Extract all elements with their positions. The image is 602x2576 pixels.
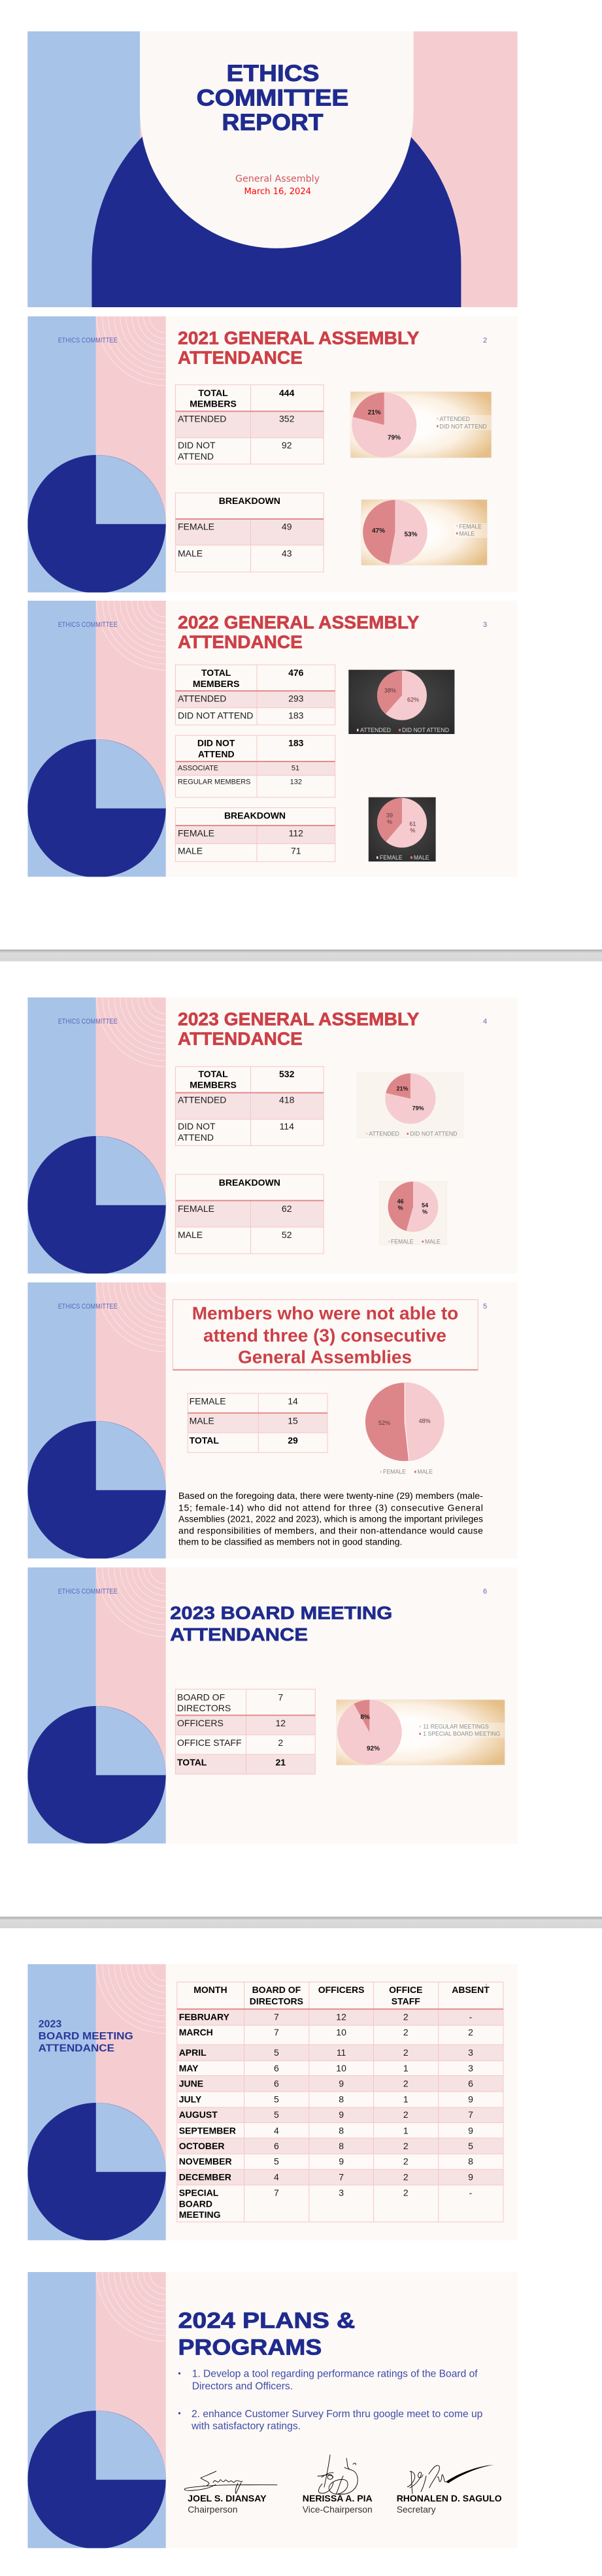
table: 2022 totals: ATTENDED [178,694,226,704]
data rows: - [469,2187,473,2198]
table: 2023 totals: 114 [280,1121,294,1131]
pie chart: 2022 attendance [348,670,454,734]
pie chart: 2023 attendance: ATTENDED [369,1130,399,1137]
footer label: ETHICS COMMITTEE [58,1303,118,1311]
data rows: 5 [274,2109,279,2120]
table: 2023 breakdown: MALE [178,1229,203,1240]
heading [178,612,420,652]
table: 2023 totals: TOTAL [198,1069,228,1079]
data rows: 8 [339,2125,344,2135]
panel: 2023 general assembly attendance [27,928,518,1274]
data rows: 7 [274,2012,279,2022]
data rows: 7 [274,2187,279,2198]
data rows: NOVEMBER [179,2156,232,2166]
cover title [197,61,348,135]
footer label: ETHICS COMMITTEE [58,1588,118,1596]
table: 2022 totals: 476 [288,667,304,678]
pie chart: 2023 gender: % [422,1209,427,1215]
signature block: chairperson: JOEL S. DIANSAY [188,2493,267,2503]
table: 2022 did not attend: 183 [288,738,304,748]
signature block: secretary: RHONALEN D. SAGULO [397,2493,502,2503]
boxed heading: Members who were not able to [192,1303,458,1323]
explanatory paragraph: Assemblies (2021, 2022 and 2023), which is among the important privileges [178,1514,483,1524]
explanatory paragraph: 15; female-14) who did not attend for three (3) consecutive General [178,1503,483,1513]
pie chart: regular vs special meetings: 1 SPECIAL BOARD MEETING [423,1730,500,1737]
table: 2022 did not attend: REGULAR MEMBERS [178,778,251,786]
pie chart: 2022 attendance: ATTENDED [360,727,391,733]
data rows: SEPTEMBER [179,2125,236,2135]
table: 2023 totals [175,1067,324,1146]
table: absentee counts: MALE [190,1415,214,1426]
data rows: - [469,2012,473,2022]
pie chart: 2021 attendance: 21% [368,409,381,416]
side heading: 2023 [39,2018,61,2030]
pie chart: absentees by gender: FEMALE [383,1469,406,1475]
pie chart: 2023 gender: FEMALE [391,1238,414,1245]
table: 2021 totals [175,385,324,464]
pie chart: 2023 gender: 46 [397,1198,404,1205]
boxed heading: General Assemblies [238,1347,412,1367]
data rows: MARCH [179,2027,213,2037]
pie chart: absentees by gender: 52% [378,1420,390,1426]
table: 2021 breakdown: BREAKDOWN [219,495,280,506]
table: board attendance summary: BOARD OF [177,1692,225,1702]
cover title: REPORT [222,110,323,135]
pie chart: absentees by gender: MALE [417,1469,433,1475]
table: 2021 totals: MEMBERS [190,399,237,409]
data rows: FEBRUARY [179,2012,230,2022]
heading [170,1603,392,1645]
pie chart: 2021 attendance: ATTENDED [439,416,470,422]
header row: DIRECTORS [250,1996,303,2006]
table: 2023 breakdown: FEMALE [178,1203,214,1214]
table: 2023 totals: MEMBERS [190,1080,237,1090]
data rows: 9 [339,2079,344,2089]
table: 2022 totals: 293 [288,694,304,704]
heading [178,2309,355,2360]
pie chart: 2022 attendance: 62% [407,697,419,703]
table: 2022 breakdown: FEMALE [178,828,214,839]
pie chart: 2021 attendance [350,392,492,458]
data rows: 4 [274,2125,279,2135]
signature block: secretary [397,2465,502,2515]
pie chart: absentees by gender: 48% [419,1418,431,1424]
data rows: 1 [403,2125,409,2135]
table: board attendance summary: TOTAL [177,1757,207,1767]
data rows: 5 [274,2156,279,2166]
table: 2022 breakdown: BREAKDOWN [224,811,286,821]
data rows: 2 [403,2079,409,2089]
data rows: 3 [468,2063,473,2073]
table: 2022 breakdown: 71 [291,846,301,856]
table: monthly attendance [177,1982,503,2222]
data rows: 9 [468,2125,473,2135]
table: 2023 breakdown: 62 [282,1203,292,1214]
side heading: ATTENDANCE [39,2043,114,2054]
data rows: 6 [274,2141,279,2151]
data rows: 8 [468,2156,473,2166]
side heading: BOARD MEETING [39,2031,133,2042]
signature block: vice-chairperson: NERISSA A. PIA [303,2493,373,2503]
heading: ATTENDANCE [178,1029,303,1048]
table: 2023 breakdown [175,1175,324,1254]
header row: 7 [485,1984,488,1988]
data rows: 6 [274,2063,279,2073]
header row: BOARD OF [252,1984,301,1995]
table: 2022 breakdown: 112 [289,828,303,839]
pie chart: 2023 gender: 54 [422,1202,428,1209]
cover subtitle: event and date: General Assembly [235,174,320,184]
table: board attendance summary: 7 [278,1692,283,1702]
data rows: 3 [468,2047,473,2058]
data rows: 2 [403,2171,409,2182]
table: 2022 did not attend: ASSOCIATE [178,765,218,773]
table: absentee counts: TOTAL [190,1435,219,1445]
pie chart: 2023 gender: % [398,1205,403,1211]
footer label: ETHICS COMMITTEE [58,1018,118,1026]
table: board attendance summary: OFFICE STAFF [177,1737,242,1748]
heading: ATTENDANCE [178,632,303,652]
table: 2021 totals: 92 [282,440,292,450]
pie chart: 2021 gender: 53% [404,531,418,539]
signature block: secretary: Secretary [397,2504,436,2515]
heading: ATTENDANCE [178,348,303,368]
pie chart: 2023 attendance: 21% [396,1086,409,1092]
table: 2023 breakdown: BREAKDOWN [219,1177,280,1188]
data rows: 2 [403,2047,409,2058]
table: 2021 breakdown [175,493,324,572]
header row: ABSENT [452,1984,490,1995]
pie chart: 2021 gender [361,499,487,565]
pie chart: absentees by gender [365,1382,444,1475]
data rows: 5 [468,2141,473,2151]
explanatory paragraph [178,1490,483,1547]
pie chart: regular vs special meetings: 92% [367,1745,380,1752]
data rows: BOARD [179,2198,212,2209]
data rows: 4 [274,2171,279,2182]
pie chart: regular vs special meetings: 11 REGULAR MEETINGS [423,1723,489,1730]
pie chart: 2023 attendance: DID NOT ATTEND [410,1130,458,1137]
table: 2022 breakdown [175,808,335,861]
data rows: OCTOBER [179,2141,224,2151]
data rows: 2 [403,2012,409,2022]
cover title: ETHICS [226,61,319,86]
data rows: 9 [339,2109,344,2120]
table: 2022 breakdown: MALE [178,846,203,856]
table: 2022 did not attend: ATTEND [198,749,235,760]
table: board attendance summary: DIRECTORS [177,1703,231,1713]
pie chart: 2021 gender: 47% [372,527,385,535]
data rows: 5 [274,2094,279,2105]
explanatory paragraph: them to be classified as members not in good standing. [178,1537,402,1547]
data rows: 10 [336,2063,346,2073]
data rows: 5 [274,2047,279,2058]
heading: 2023 BOARD MEETING [170,1603,392,1623]
heading [178,1009,420,1048]
heading: ATTENDANCE [170,1624,308,1645]
pie chart: 2023 attendance [357,1073,463,1138]
pie chart: 2022 gender: MALE [414,854,429,861]
table: 2021 totals: TOTAL [198,388,228,398]
cover subtitle: event and date [235,174,320,197]
table: 2022 totals: MEMBERS [193,678,239,689]
table: 2021 totals: ATTEND [178,451,214,461]
pie chart: 2022 attendance: 38% [384,688,396,694]
data rows: 2 [403,2141,409,2151]
data rows: 12 [336,2012,346,2022]
data rows: 2 [403,2187,409,2198]
panel: 2024 plans and programs [27,2203,518,2549]
panel: 2021 general assembly attendance [27,247,518,593]
pie chart: 2023 gender: MALE [425,1238,441,1245]
table: 2022 totals: TOTAL [201,667,231,678]
data rows: 7 [468,2109,473,2120]
table: 2022 totals: DID NOT ATTEND [178,710,253,720]
data rows: MAY [179,2063,199,2073]
pie chart: 2021 attendance: 79% [388,435,401,442]
pie chart: 2022 attendance: DID NOT ATTEND [402,727,449,733]
heading [178,328,420,368]
boxed heading: attend three (3) consecutive [203,1325,446,1345]
page number: 3 [483,621,487,629]
page number: 6 [483,1588,487,1596]
header row: MONTH [193,1984,227,1995]
table: 2022 totals [175,665,335,725]
pie chart: 2022 gender: % [410,828,415,834]
data rows: 2 [403,2156,409,2166]
table: 2022 did not attend [175,735,335,797]
table: 2021 breakdown: FEMALE [178,522,214,532]
table: 2021 totals: 352 [279,414,295,424]
plan item 2: 2. enhance Customer Survey Form thru google meet to come up [192,2409,482,2420]
page number: 2 [483,337,487,344]
table: 2021 totals: DID NOT [178,440,216,450]
signature block: chairperson: Chairperson [188,2504,238,2515]
data rows: 2 [468,2027,473,2037]
plan item 1 [178,2369,478,2392]
page number: 5 [483,1303,487,1311]
table: absentee counts [188,1394,327,1452]
data rows: DECEMBER [179,2171,231,2182]
pie chart: regular vs special meetings [336,1699,505,1765]
table: 2022 totals: 183 [288,710,304,720]
data rows: SPECIAL [179,2187,219,2198]
table: 2021 totals: ATTENDED [178,414,226,424]
table: 2023 totals: ATTENDED [178,1095,226,1105]
data rows: 7 [274,2027,279,2037]
pie chart: 2022 gender: FEMALE [380,854,403,861]
heading: PROGRAMS [178,2335,322,2360]
table: board attendance summary: 2 [278,1737,283,1748]
pie chart: 2022 gender: 61 [409,820,416,827]
header row [193,1984,490,2006]
panel: 2022 general assembly attendance [27,531,518,877]
data rows: JUNE [179,2079,203,2089]
data rows: 1 [403,2094,409,2105]
data rows: 8 [339,2141,344,2151]
heading: 2022 GENERAL ASSEMBLY [178,612,420,633]
footer label: ETHICS COMMITTEE [58,337,118,344]
table: 2023 totals: 532 [279,1069,295,1079]
heading: 2024 PLANS & [178,2309,355,2333]
table: 2022 did not attend: 132 [290,778,302,786]
table: absentee counts: 15 [288,1415,298,1426]
table: absentee counts: FEMALE [190,1396,226,1406]
data rows: 1 [403,2063,409,2073]
footer label: ETHICS COMMITTEE [58,621,118,629]
side heading [39,2018,133,2054]
plan item 1: Directors and Officers. [192,2381,293,2392]
pie chart: 2022 gender: % [387,819,392,826]
pie chart: 2021 attendance: DID NOT ATTEND [439,423,487,429]
table: board attendance summary [175,1689,315,1774]
panel: cover slide [27,31,518,307]
table: board attendance summary: OFFICERS [177,1718,224,1728]
header row: OFFICE [389,1984,422,1995]
heading: 2021 GENERAL ASSEMBLY [178,328,420,348]
panel: 2023 board meeting attendance [27,1498,518,1844]
pie chart: regular vs special meetings: 8% [360,1714,370,1721]
table: 2022 did not attend: 51 [292,765,299,773]
cover title: COMMITTEE [197,86,348,111]
signature block: vice-chairperson: Vice-Chairperson [303,2504,373,2515]
header row: STAFF [392,1996,420,2006]
pie chart: 2022 gender: 39 [386,812,393,818]
cover subtitle: event and date: March 16, 2024 [244,187,311,197]
table: board attendance summary: 12 [276,1718,286,1728]
data rows: 7 [339,2171,344,2182]
pie chart: 2022 gender [369,797,436,861]
data rows: 9 [468,2094,473,2105]
data rows: 10 [336,2027,346,2037]
data rows: AUGUST [179,2109,218,2120]
boxed heading [173,1299,478,1370]
data rows: 2 [403,2109,409,2120]
table: 2023 totals: ATTEND [178,1132,214,1143]
table: 2023 breakdown: 52 [282,1229,292,1240]
pie chart: 2023 gender [379,1181,447,1245]
data rows: 8 [339,2094,344,2105]
plan item 1: 1. Develop a tool regarding performance ratings of the Board of [192,2369,478,2380]
pie chart: 2021 gender: MALE [459,531,475,537]
header row: OFFICERS [318,1984,364,1995]
table: 2021 breakdown: 43 [282,548,292,558]
signature block: vice-chairperson [303,2455,373,2515]
data rows: APRIL [179,2047,207,2058]
data rows: 6 [274,2079,279,2089]
plan item 2: with satisfactory ratings. [191,2421,301,2432]
table: absentee counts: 29 [288,1435,298,1445]
explanatory paragraph: Based on the foregoing data, there were twenty-nine (29) members (male- [178,1490,483,1501]
data rows [179,2012,473,2220]
panel: monthly board meeting attendance [27,1895,518,2241]
data rows: 6 [468,2079,473,2089]
data rows: 3 [339,2187,344,2198]
data rows: 9 [468,2171,473,2182]
panel: members absent from three consecutive assemblies [27,1213,518,1559]
table: 2021 breakdown: 49 [282,522,292,532]
data rows: 2 [403,2027,409,2037]
page number: 4 [483,1018,487,1026]
data rows: JULY [179,2094,202,2105]
data rows: 11 [337,2047,346,2058]
plan item 2 [178,2409,482,2432]
data rows: MEETING [179,2209,221,2220]
pie chart: 2023 attendance: 79% [412,1105,424,1112]
data rows: 9 [339,2156,344,2166]
table: 2021 totals: 444 [279,388,295,398]
table: 2023 totals: 418 [279,1095,295,1105]
table: 2023 totals: DID NOT [178,1121,216,1131]
table: absentee counts: 14 [288,1396,298,1406]
table: board attendance summary: 21 [276,1757,286,1767]
explanatory paragraph: and responsibilities of members, and their non-attendance would cause [178,1526,483,1536]
signature block: chairperson [184,2471,277,2515]
table: 2021 breakdown: MALE [178,548,203,558]
pie chart: 2021 gender: FEMALE [459,523,482,529]
table: 2022 did not attend: DID NOT [197,738,235,748]
heading: 2023 GENERAL ASSEMBLY [178,1009,420,1029]
